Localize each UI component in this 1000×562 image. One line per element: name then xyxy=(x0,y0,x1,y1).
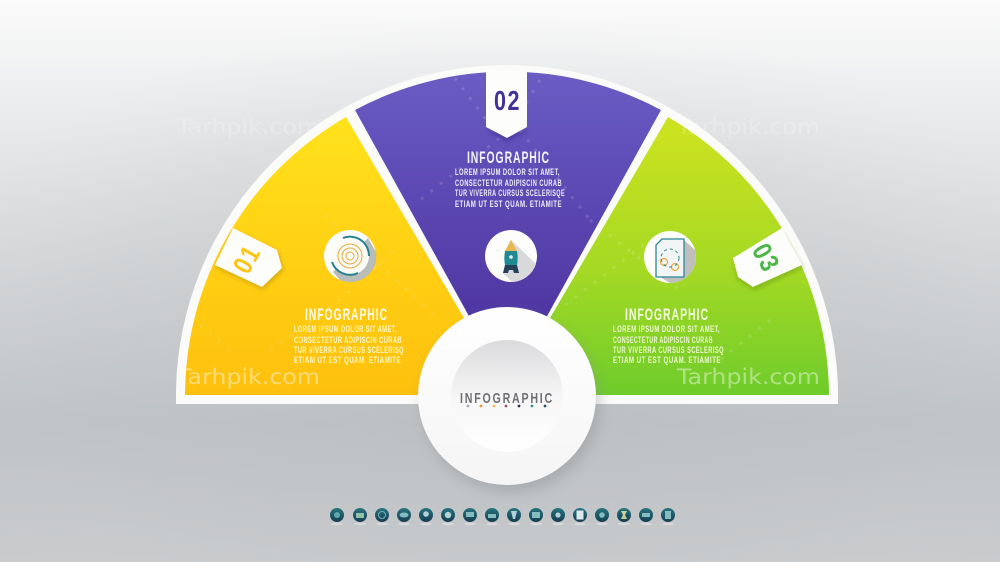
heading: purple panel: INFOGRAPHIC xyxy=(467,148,550,167)
icon row xyxy=(330,508,675,525)
text block: yellow panel: TUR VIVERRA CURSUS SCELERISQ xyxy=(294,345,404,355)
tag: 02: 02 xyxy=(494,85,521,116)
tag: 02 xyxy=(486,70,528,142)
panel: green segment 03 xyxy=(550,117,829,395)
text block: green panel: ETIAM UT EST QUAM. ETIAMITE xyxy=(613,355,721,365)
watermarks: Tarhpik.com xyxy=(676,115,820,139)
hub title: INFOGRAPHIC xyxy=(460,390,554,407)
panel: yellow segment 01 xyxy=(185,117,464,395)
text block: green panel: TUR VIVERRA CURSUS SCELERISQ xyxy=(613,345,724,355)
text block: yellow panel: LOREM IPSUM DOLOR SIT AMET, xyxy=(294,324,397,334)
heading: yellow panel: INFOGRAPHIC xyxy=(305,305,388,324)
text block: purple panel: TUR VIVERRA CURSUS SCELERISQE xyxy=(455,188,565,198)
text block: yellow panel: ETIAM UT EST QUAM. ETIAMITE xyxy=(294,355,401,365)
text block: purple panel: LOREM IPSUM DOLOR SIT AMET, xyxy=(455,167,560,177)
hub dots xyxy=(467,405,546,407)
watermarks: Tarhpik.com xyxy=(176,365,320,389)
text block: yellow panel xyxy=(294,324,404,365)
text block: purple panel: CONSECTETUR ADIPISCIN CURAB xyxy=(455,178,562,188)
watermarks xyxy=(176,115,820,389)
text block: yellow panel: CONSECTETUR ADIPISCIN CURAB xyxy=(294,335,402,345)
text block: green panel: LOREM IPSUM DOLOR SIT AMET, xyxy=(613,324,720,334)
tag: 03: 03 xyxy=(746,238,786,278)
text block: purple panel: ETIAM UT EST QUAM. ETIAMITE xyxy=(455,199,562,209)
semicircle white backing xyxy=(176,65,838,404)
text block: green panel xyxy=(613,324,724,365)
text block: green panel: CONSECTETUR ADIPISCIN CURAB xyxy=(613,335,713,345)
center hub xyxy=(418,307,599,492)
icon: target xyxy=(324,230,376,282)
watermarks: Tarhpik.com xyxy=(176,115,320,139)
tag: 03 xyxy=(733,228,804,291)
icon: rocket xyxy=(485,230,537,282)
tag: 01 xyxy=(215,228,284,290)
tag: 01: 01 xyxy=(227,239,267,279)
watermarks: Tarhpik.com xyxy=(676,365,820,389)
heading: green panel: INFOGRAPHIC xyxy=(625,305,709,324)
panel: purple segment 02 xyxy=(355,70,661,318)
text block: purple panel xyxy=(455,167,565,209)
icon: document xyxy=(644,231,696,283)
